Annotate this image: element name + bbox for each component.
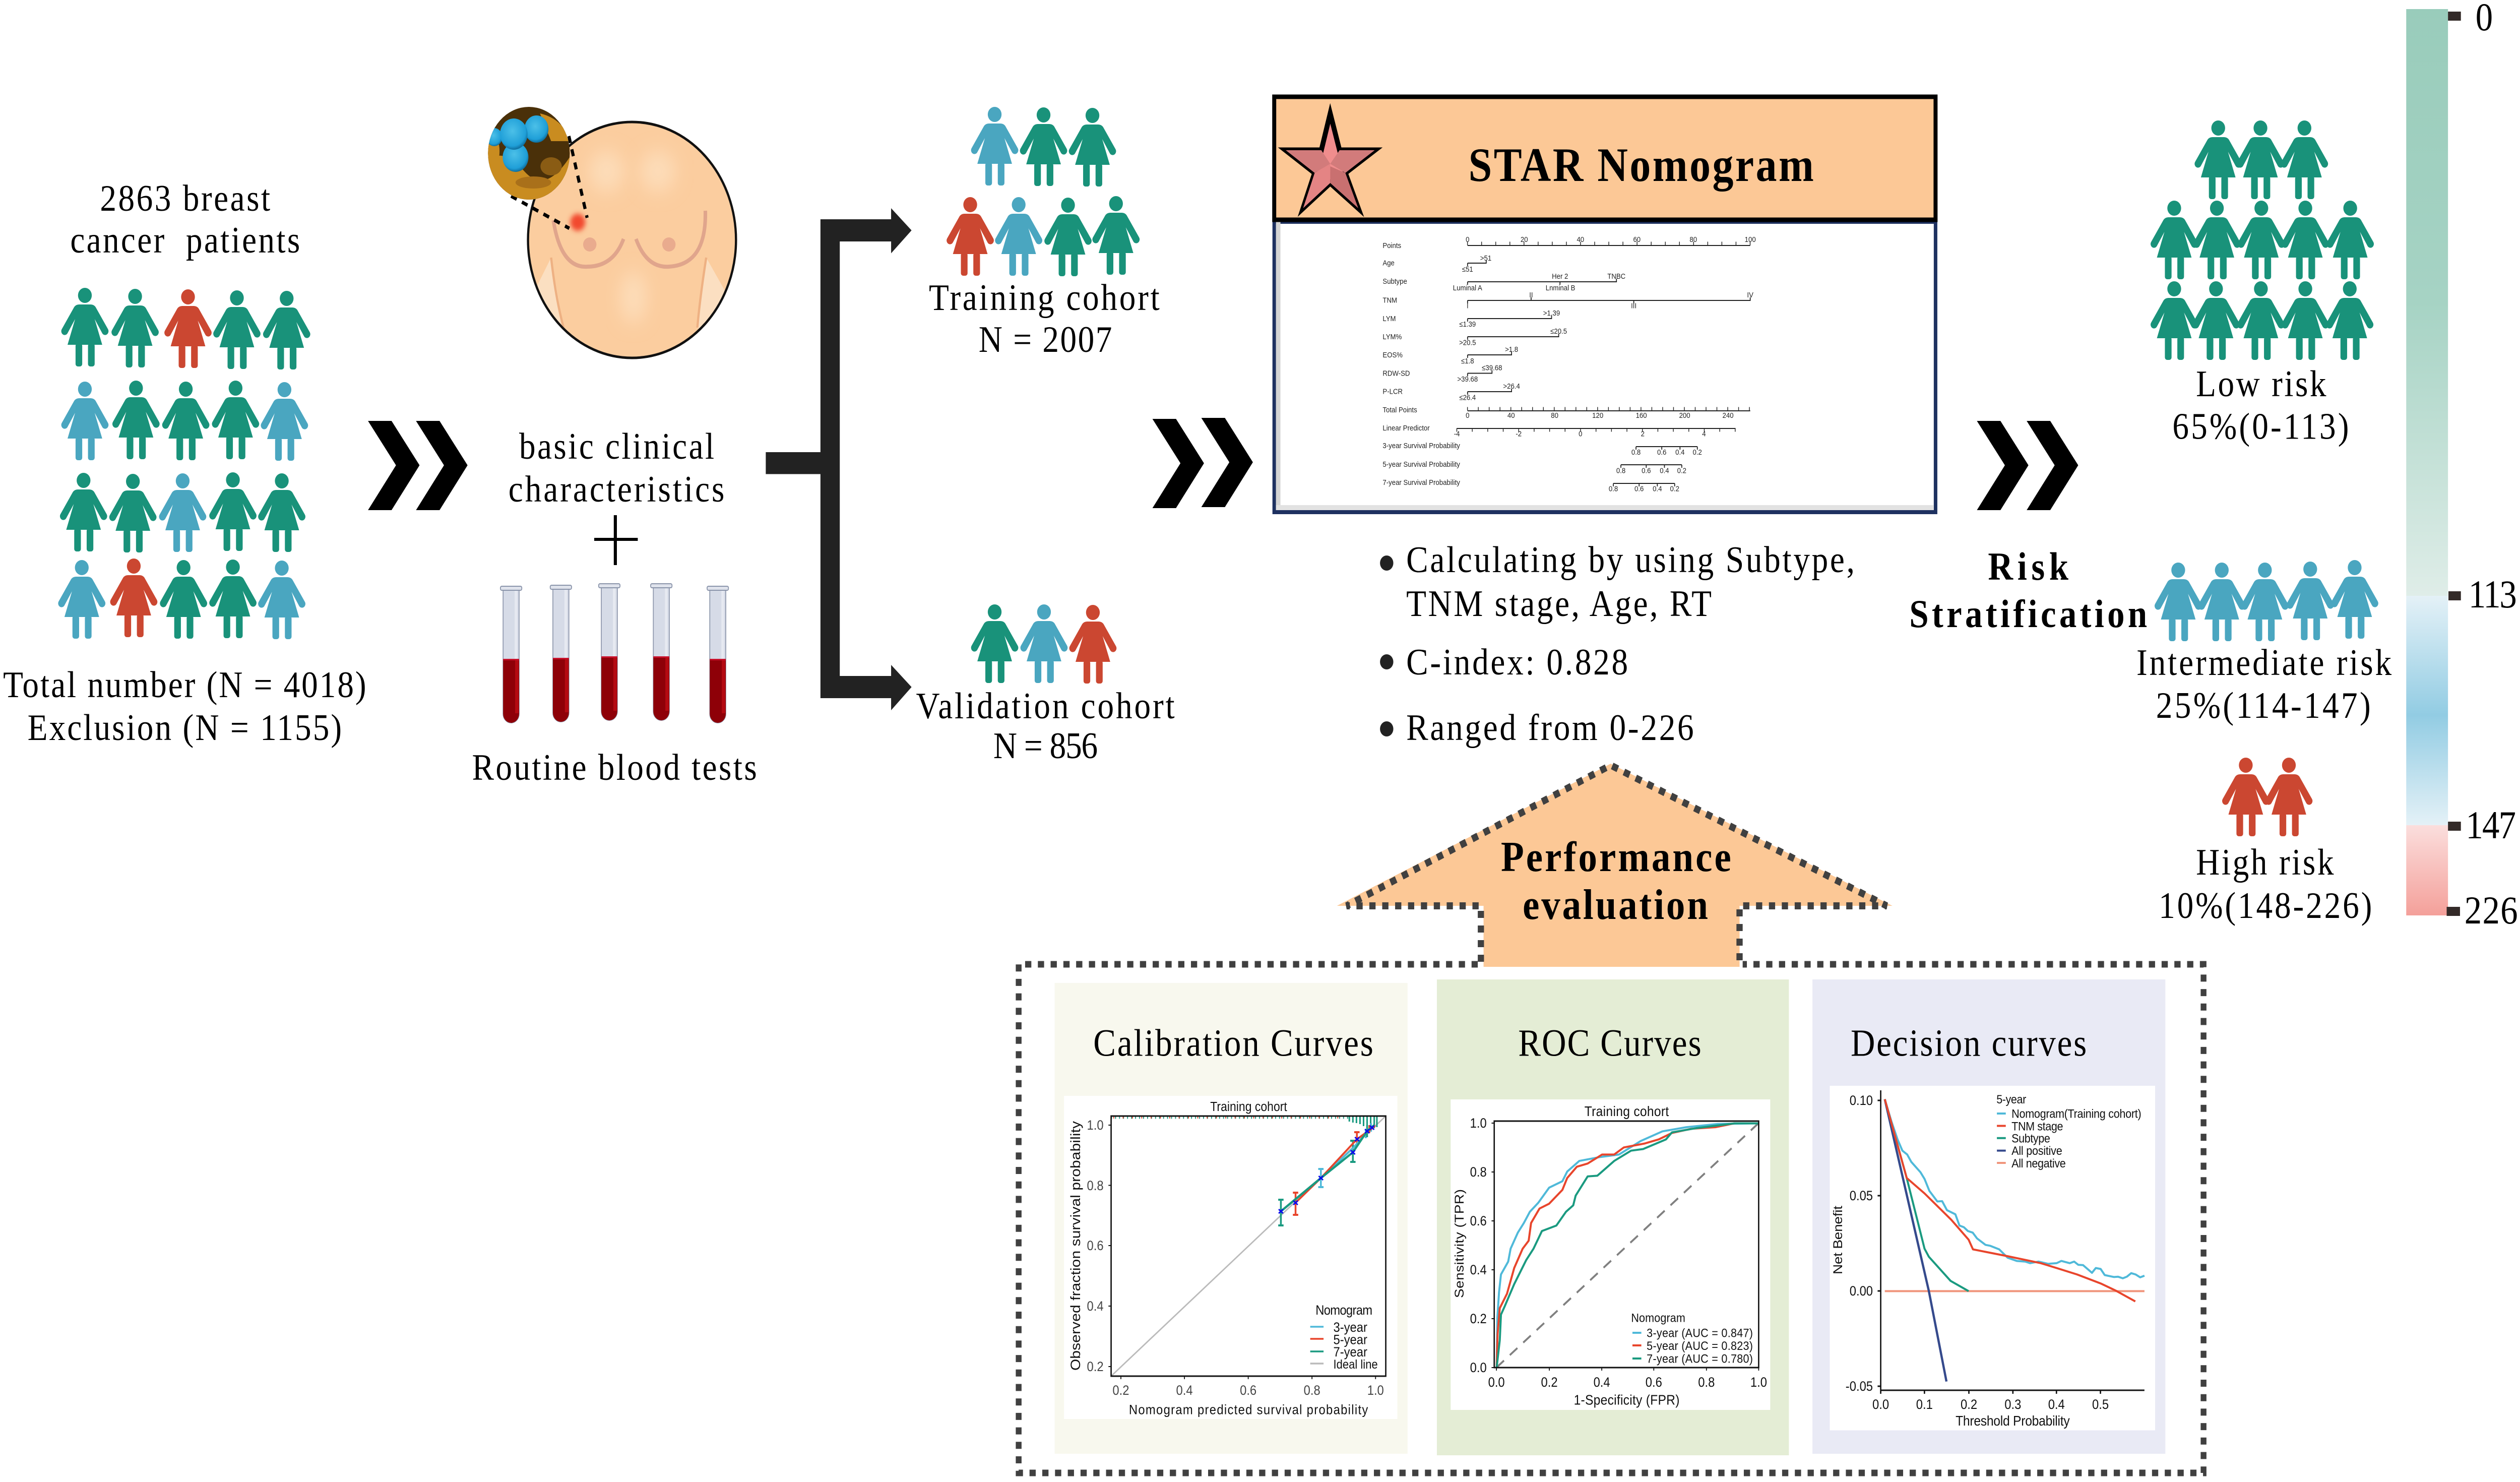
decision curve chart: 0.4 (2048, 1397, 2065, 1412)
nomogram chart: >20.5 (1459, 338, 1476, 347)
ROC chart (1451, 1099, 1770, 1410)
nomogram chart: EOS% (1382, 350, 1403, 359)
icon: star (1286, 113, 1375, 208)
bullet list: nomogram notes: Calculating by using Subtype, (1406, 539, 1855, 581)
decision curve chart: Threshold Probability (1956, 1413, 2070, 1429)
nomogram chart: 0.4 (1653, 484, 1662, 493)
icon group: intermediate risk (2155, 560, 2378, 641)
nomogram chart: 0.4 (1660, 466, 1669, 475)
ROC chart: 0.8 (1470, 1165, 1487, 1180)
nomogram chart: 0 (1579, 429, 1583, 438)
icon grid: patients (58, 288, 310, 639)
decision curve chart: 0.1 (1916, 1397, 1933, 1412)
calibration chart: 1.0 (1087, 1118, 1104, 1133)
heading: Calibration Curves (1093, 1022, 1373, 1064)
text: training cohort: Training cohort (929, 277, 1160, 319)
nomogram chart: Luminal A (1453, 283, 1482, 292)
ROC chart: 0.8 (1698, 1375, 1715, 1390)
nomogram chart: ≤1.8 (1461, 356, 1474, 365)
ROC chart: 0.2 (1470, 1312, 1487, 1326)
legend: 7-year (AUC = 0.780) (1647, 1351, 1753, 1366)
heading: 2863 breast cancer patients (70, 178, 300, 261)
nomogram chart: 0 (1466, 235, 1470, 243)
calibration chart: 0.2 (1087, 1360, 1104, 1374)
calibration chart: 0.8 (1087, 1179, 1104, 1193)
nomogram chart: 0.6 (1642, 466, 1651, 475)
icon: plus sign (594, 515, 638, 565)
nomogram chart: 0.2 (1677, 466, 1686, 475)
text: total number and exclusion (3, 664, 366, 749)
legend: Nomogram (1631, 1311, 1685, 1325)
text: total number and exclusion: Exclusion (N = 1155) (28, 707, 342, 749)
decision curve chart: 0.00 (1850, 1284, 1873, 1299)
nomogram chart: ≤51 (1462, 265, 1473, 273)
icon: blood test tubes (500, 584, 728, 723)
legend: Subtype (2011, 1131, 2050, 1145)
nomogram chart: TNM (1382, 296, 1397, 304)
nomogram chart: II (1529, 290, 1533, 299)
decision curve chart: 0.5 (2092, 1397, 2109, 1412)
text: low risk: 65%(0-113) (2172, 406, 2349, 447)
ROC chart: Sensitivity (TPR) (1452, 1189, 1466, 1298)
nomogram chart: -2 (1516, 429, 1522, 438)
title: STAR Nomogram: STAR Nomogram (1469, 139, 1814, 192)
ROC chart: 0.6 (1470, 1214, 1487, 1228)
nomogram chart: >26.4 (1503, 382, 1520, 390)
legend: 3-year (1334, 1320, 1367, 1335)
nomogram chart: 0.4 (1675, 448, 1685, 456)
ROC chart: 1-Specificity (FPR) (1574, 1392, 1679, 1408)
legend: All positive (2011, 1144, 2062, 1157)
text: low risk (2172, 363, 2349, 447)
calibration chart: Observed fraction survival probability (1068, 1121, 1083, 1371)
colour scale bar: 147 (2466, 803, 2516, 847)
arrow: chevrons 1 (368, 421, 468, 510)
nomogram chart: -4 (1454, 429, 1460, 438)
heading: ROC Curves (1518, 1022, 1702, 1064)
nomogram chart: Linear Predictor (1382, 423, 1430, 432)
text: high risk (2159, 842, 2372, 927)
nomogram chart: RDW-SD (1382, 369, 1410, 378)
legend: TNM stage (2011, 1119, 2063, 1133)
nomogram chart: P-LCR (1382, 387, 1403, 396)
nomogram chart: >1.39 (1543, 308, 1560, 317)
icon group: low risk (2151, 120, 2374, 360)
legend: All negative (2011, 1156, 2066, 1170)
text: risk stratification: Risk (1988, 544, 2068, 588)
panel: calibration curves (1055, 983, 1408, 1454)
ROC chart: 0.0 (1470, 1361, 1487, 1375)
nomogram chart: 120 (1592, 411, 1603, 419)
legend: 5-year (1996, 1092, 2027, 1106)
nomogram chart: 0.2 (1670, 484, 1679, 493)
text: validation cohort (916, 686, 1175, 767)
calibration chart: 0.8 (1304, 1383, 1320, 1398)
nomogram chart: ≤20.5 (1550, 327, 1567, 335)
nomogram chart: 160 (1636, 411, 1647, 419)
panel: decision curves (1812, 979, 2165, 1454)
calibration chart: Nomogram predicted survival probability (1129, 1402, 1368, 1417)
icon group: validation cohort (971, 604, 1116, 684)
text: performance evaluation: Performance (1501, 834, 1731, 881)
nomogram chart: I (1467, 301, 1469, 310)
calibration chart: 0.6 (1087, 1239, 1104, 1253)
arrow: chevrons 2 (1153, 418, 1253, 508)
nomogram chart: Points (1382, 241, 1401, 250)
dashed frame (1019, 964, 2203, 1473)
text: performance evaluation (1501, 834, 1731, 929)
nomogram chart: 0.8 (1609, 484, 1618, 493)
legend: 3-year (AUC = 0.847) (1647, 1326, 1753, 1340)
calibration chart: Training cohort (1210, 1100, 1287, 1114)
icon group: training cohort (947, 107, 1140, 276)
text: routine blood tests: Routine blood tests (472, 747, 757, 788)
calibration chart: 0.6 (1240, 1383, 1256, 1398)
colour scale bar (2406, 0, 2518, 932)
icon group: high risk (2222, 758, 2312, 836)
legend: Nomogram (1315, 1303, 1372, 1318)
calibration chart: 0.4 (1087, 1299, 1104, 1314)
calibration chart (1064, 1096, 1397, 1419)
text: training cohort (929, 277, 1160, 360)
nomogram chart: LYM (1382, 314, 1396, 323)
nomogram chart: IV (1747, 290, 1753, 299)
legend: Nomogram(Training cohort) (2011, 1106, 2141, 1121)
nomogram chart: 0.6 (1634, 484, 1644, 493)
heading: Decision curves (1851, 1022, 2087, 1064)
text: training cohort: N = 2007 (979, 319, 1112, 360)
nomogram chart: 7-year Survival Probability (1382, 478, 1461, 486)
heading: 2863 breast cancer patients: cancer patients (70, 220, 300, 261)
text: low risk: Low risk (2196, 363, 2326, 405)
legend: 5-year (1334, 1332, 1367, 1347)
calibration chart: 0.2 (1112, 1383, 1129, 1398)
nomogram chart: Lnminal B (1546, 283, 1575, 292)
nomogram chart: Subtype (1382, 277, 1407, 285)
nomogram chart: 5-year Survival Probability (1382, 460, 1461, 468)
decision curve chart: 0.05 (1850, 1189, 1873, 1203)
header band (1274, 97, 1935, 220)
ROC chart: 1.0 (1470, 1116, 1487, 1131)
ROC chart: 0.4 (1594, 1375, 1610, 1390)
ROC chart: 0.0 (1488, 1375, 1505, 1390)
nomogram chart: ≤1.39 (1459, 320, 1476, 328)
nomogram chart: >39.68 (1457, 375, 1478, 383)
nomogram chart: III (1631, 301, 1636, 310)
nomogram chart: 0.6 (1657, 448, 1666, 456)
calibration chart: 0.4 (1176, 1383, 1193, 1398)
ROC chart: 0.4 (1470, 1263, 1487, 1277)
decision curve chart: 0.2 (1961, 1397, 1977, 1412)
ROC chart: Training cohort (1585, 1103, 1669, 1119)
legend: Ideal line (1334, 1357, 1378, 1371)
ROC chart: 0.6 (1646, 1375, 1662, 1390)
text: intermediate risk: Intermediate risk (2136, 642, 2391, 684)
nomogram chart: LYM% (1382, 332, 1402, 341)
legend (1631, 1311, 1753, 1366)
panel: STAR nomogram (1274, 97, 1935, 512)
nomogram chart: TNBC (1607, 272, 1625, 280)
arrow: performance evaluation (1337, 764, 1893, 967)
decision curve chart: Net Benefit (1831, 1205, 1845, 1274)
decision curve chart: 0.10 (1850, 1093, 1873, 1108)
nomogram chart: Age (1382, 259, 1395, 267)
bullet list: nomogram notes: Ranged from 0-226 (1406, 707, 1694, 749)
nomogram chart: 0 (1466, 411, 1470, 419)
text: intermediate risk: 25%(114-147) (2156, 685, 2371, 726)
nomogram chart: >51 (1480, 254, 1491, 262)
text: risk stratification (1909, 544, 2147, 636)
decision curve chart: 0.0 (1872, 1397, 1889, 1412)
calibration chart: 1.0 (1367, 1383, 1384, 1398)
nomogram chart: 3-year Survival Probability (1382, 441, 1461, 450)
panel: ROC curves (1437, 979, 1789, 1455)
decision curve chart: -0.05 (1846, 1379, 1873, 1394)
bullet list: nomogram notes: C-index: 0.828 (1406, 642, 1628, 683)
legend (1996, 1092, 2141, 1170)
nomogram chart: >1.8 (1505, 345, 1518, 353)
nomogram chart: 240 (1723, 411, 1734, 419)
nomogram chart: 4 (1702, 429, 1706, 438)
arrow: chevrons 3 (1977, 421, 2078, 510)
nomogram chart: 80 (1551, 411, 1558, 419)
ROC chart: 1.0 (1750, 1375, 1767, 1390)
nomogram chart: 20 (1521, 235, 1528, 243)
nomogram chart: 0.2 (1693, 448, 1702, 456)
nomogram chart: 2 (1641, 429, 1645, 438)
text: validation cohort: Validation cohort (916, 686, 1175, 727)
decision curve chart (1830, 1086, 2155, 1431)
text: intermediate risk (2136, 642, 2391, 726)
nomogram chart: 40 (1507, 411, 1515, 419)
text: risk stratification: Stratification (1909, 592, 2147, 636)
bullet list: nomogram notes (1380, 539, 1855, 749)
nomogram chart (1382, 235, 1756, 493)
legend: 7-year (1334, 1345, 1367, 1360)
text: high risk: 10%(148-226) (2159, 885, 2372, 927)
text: basic clinical characteristics: basic clinical (519, 426, 714, 467)
decision curve chart: 0.3 (2004, 1397, 2021, 1412)
icon: breast illustration with tumour (486, 107, 746, 363)
text: validation cohort: N = 856 (993, 725, 1098, 767)
nomogram chart: 60 (1633, 235, 1641, 243)
legend: 5-year (AUC = 0.823) (1647, 1339, 1753, 1352)
nomogram chart: 40 (1577, 235, 1584, 243)
text: performance evaluation: evaluation (1523, 882, 1708, 929)
colour scale bar: 226 (2465, 888, 2518, 932)
text: basic clinical characteristics (509, 426, 724, 510)
heading: 2863 breast cancer patients: 2863 breast (100, 178, 270, 219)
nomogram chart: ≤39.68 (1482, 363, 1502, 372)
nomogram chart: 0.8 (1631, 448, 1641, 456)
text: total number and exclusion: Total number (N = 4018) (3, 664, 366, 706)
legend (1310, 1303, 1378, 1371)
text: basic clinical characteristics: characteristics (509, 469, 724, 510)
nomogram chart: Her 2 (1552, 272, 1568, 280)
ROC chart: 0.2 (1541, 1375, 1558, 1390)
nomogram chart: 0.8 (1616, 466, 1625, 475)
bullet list: nomogram notes: TNM stage, Age, RT (1406, 583, 1712, 625)
nomogram chart: 80 (1689, 235, 1697, 243)
nomogram chart: Total Points (1382, 405, 1417, 414)
nomogram chart: 100 (1745, 235, 1756, 243)
text: high risk: High risk (2196, 842, 2334, 883)
colour scale bar: 113 (2469, 572, 2517, 616)
nomogram chart: 200 (1679, 411, 1690, 419)
nomogram chart: ≤26.4 (1459, 393, 1476, 402)
arrow: branching bracket (766, 208, 912, 710)
